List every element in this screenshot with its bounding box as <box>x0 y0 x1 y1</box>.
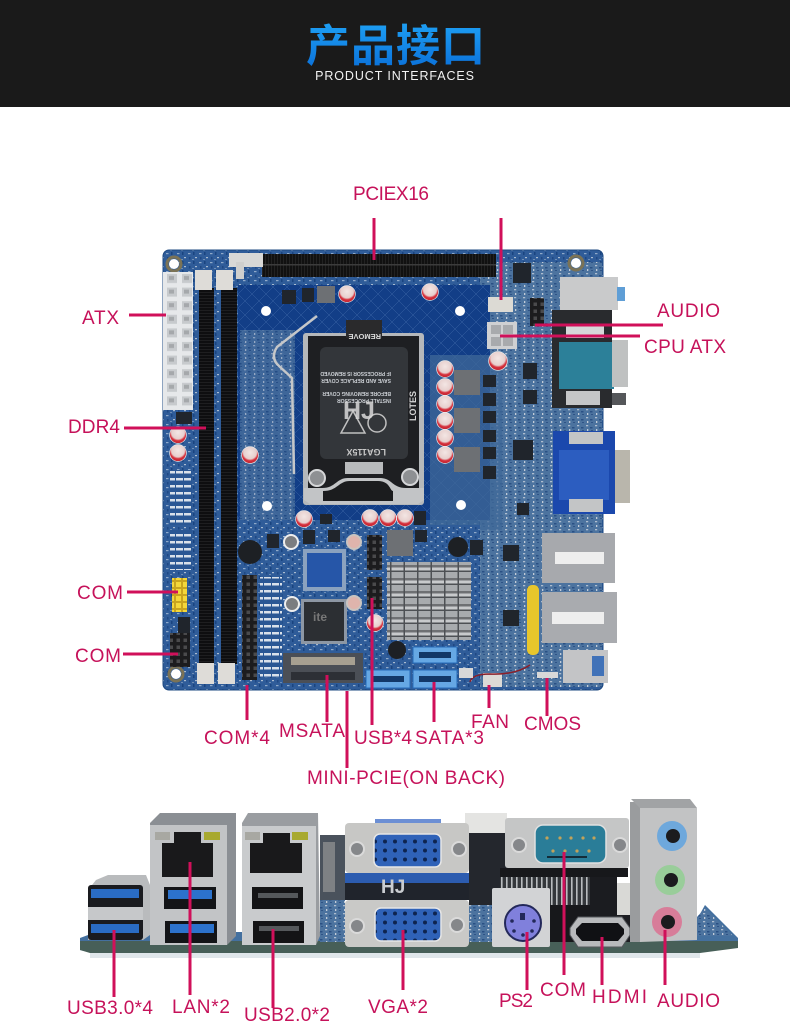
callout: HDMI <box>592 937 647 1008</box>
fan wire <box>470 665 530 682</box>
white connector behind <box>617 883 640 917</box>
sata slots <box>372 652 451 682</box>
vga stack <box>345 819 469 947</box>
chipset blue <box>303 549 346 591</box>
cpu socket: IF PROCESSOR IS REMOVED <box>320 370 391 376</box>
right side area <box>480 262 602 687</box>
left stripes <box>170 470 192 570</box>
callout: DDR4 <box>68 417 206 438</box>
cpu socket: LOTES <box>408 391 418 421</box>
callout: ATX: ATX <box>82 308 119 329</box>
callout: FAN: FAN <box>471 712 509 733</box>
cpu socket: REMOVE <box>348 332 381 341</box>
cpu atx connector <box>487 322 517 349</box>
callout: PCIEX16: PCIEX16 <box>353 184 429 205</box>
buzzer and big caps <box>238 537 468 659</box>
callout: HDMI: HDMI <box>592 987 647 1008</box>
callout: USB2.0*2 <box>244 929 330 1026</box>
callout: USB3.0*4 <box>67 930 153 1019</box>
battery <box>527 585 539 655</box>
soft shadow under board <box>90 952 700 958</box>
ite chip <box>301 599 347 644</box>
capacitors <box>170 284 507 631</box>
cpu socket <box>303 320 424 505</box>
callout: COM yellow header: COM <box>77 583 123 604</box>
atx connector <box>163 272 193 410</box>
cpu fan connector <box>488 297 513 312</box>
title: 产品接口 <box>306 22 486 71</box>
audio stack <box>630 799 697 942</box>
rear io photo <box>80 799 738 958</box>
lan 2 with usb <box>242 813 320 945</box>
header band <box>0 0 790 107</box>
callout: CMOS <box>524 678 581 735</box>
callout: PCIEX16 <box>353 184 429 260</box>
sys fan connector <box>483 673 502 687</box>
dark behind hdmi <box>550 905 592 942</box>
cpu socket: INSTALL PROCESSOR <box>337 397 391 403</box>
callout: USB3.0*4: USB3.0*4 <box>67 998 153 1019</box>
callout: COM*4: COM*4 <box>204 728 270 749</box>
callout: SATA*3 <box>415 682 484 749</box>
callout: MSATA: MSATA <box>279 721 345 742</box>
back parts dark <box>320 835 345 900</box>
dimm slots <box>195 270 237 684</box>
inductors <box>317 286 480 556</box>
cpu socket: HJ <box>343 397 375 425</box>
corner mount rings <box>167 256 583 681</box>
mounting holes <box>169 258 581 679</box>
small white jumper <box>459 668 473 678</box>
callout: MINI-PCIE: MINI-PCIE(ON BACK) <box>307 768 505 789</box>
usb3 stack <box>88 875 150 940</box>
callout: SATA*3: SATA*3 <box>415 728 484 749</box>
sata ports <box>366 647 457 688</box>
callout: CPU ATX: CPU ATX <box>644 337 726 358</box>
cpu socket: BEFORE REMOVING COVER <box>322 390 391 396</box>
standoffs <box>284 535 361 611</box>
callout: ATX <box>82 308 166 329</box>
callout: fan leader <box>500 218 502 300</box>
dark behind hdmi right <box>592 915 640 942</box>
callout: PS2 <box>499 932 533 1012</box>
callout: VGA*2: VGA*2 <box>368 997 428 1018</box>
cpu socket: LGA115X <box>346 447 386 457</box>
usb port <box>563 650 608 683</box>
callout: MSATA <box>279 675 345 742</box>
lower board area <box>240 525 480 685</box>
ite chip: ite <box>313 610 327 624</box>
capacitor behind <box>323 842 335 892</box>
callout: COM lower header: COM <box>75 646 121 667</box>
cpu surround <box>238 285 490 520</box>
callout: FAN <box>471 685 509 733</box>
ps2 port <box>492 888 550 947</box>
pcb side <box>80 941 738 953</box>
header pins by audio <box>530 298 544 326</box>
rear vga port <box>553 431 630 514</box>
silk behind <box>320 900 345 942</box>
msata slot <box>283 653 363 683</box>
cmos connector <box>537 672 558 678</box>
callout: CMOS: CMOS <box>524 714 581 735</box>
hdmi port <box>570 917 630 947</box>
heatsink <box>387 562 471 640</box>
lan 1 with usb <box>150 813 236 945</box>
callout: DDR4: DDR4 <box>68 417 120 438</box>
callout: AUDIO: AUDIO <box>657 301 720 322</box>
vrm component area <box>430 355 502 530</box>
vga stack: HJ <box>381 877 405 898</box>
silk behind vga <box>469 905 494 942</box>
callout: PS2: PS2 <box>499 991 533 1012</box>
rear audio <box>560 277 625 310</box>
com port <box>500 818 629 917</box>
lan ports <box>542 533 617 643</box>
callout: USB*4: USB*4 <box>354 728 412 749</box>
pcb <box>163 250 603 690</box>
motherboard top view <box>163 250 630 690</box>
cpu socket: SAVE AND REPLACE COVER <box>321 377 391 383</box>
pins behind com <box>500 877 592 907</box>
callout: COM yellow header <box>77 583 178 604</box>
callout: AUDIO rear <box>657 930 720 1012</box>
yellow com header <box>172 578 187 612</box>
pcb edge <box>80 905 738 951</box>
back board white connector <box>465 813 507 835</box>
callout: LAN*2: LAN*2 <box>172 997 230 1018</box>
pin headers <box>170 535 382 680</box>
rear com port <box>552 310 628 408</box>
mosfets and small chips <box>176 263 537 633</box>
callout: AUDIO rear: AUDIO <box>657 991 720 1012</box>
callout: VGA*2 <box>368 930 428 1018</box>
callout: COM lower header <box>75 646 178 667</box>
left silk area <box>240 330 295 520</box>
callout: COM rear: COM <box>540 980 586 1001</box>
right pcb corner texture <box>697 908 733 936</box>
central dark parts <box>469 833 509 910</box>
callout: COM*4 <box>204 685 270 749</box>
pcie slot <box>229 253 496 279</box>
com4 silk stripes <box>260 577 282 677</box>
callout: USB2.0*2: USB2.0*2 <box>244 1005 330 1026</box>
subtitle: PRODUCT INTERFACES <box>315 69 475 83</box>
socket lever <box>274 316 317 474</box>
